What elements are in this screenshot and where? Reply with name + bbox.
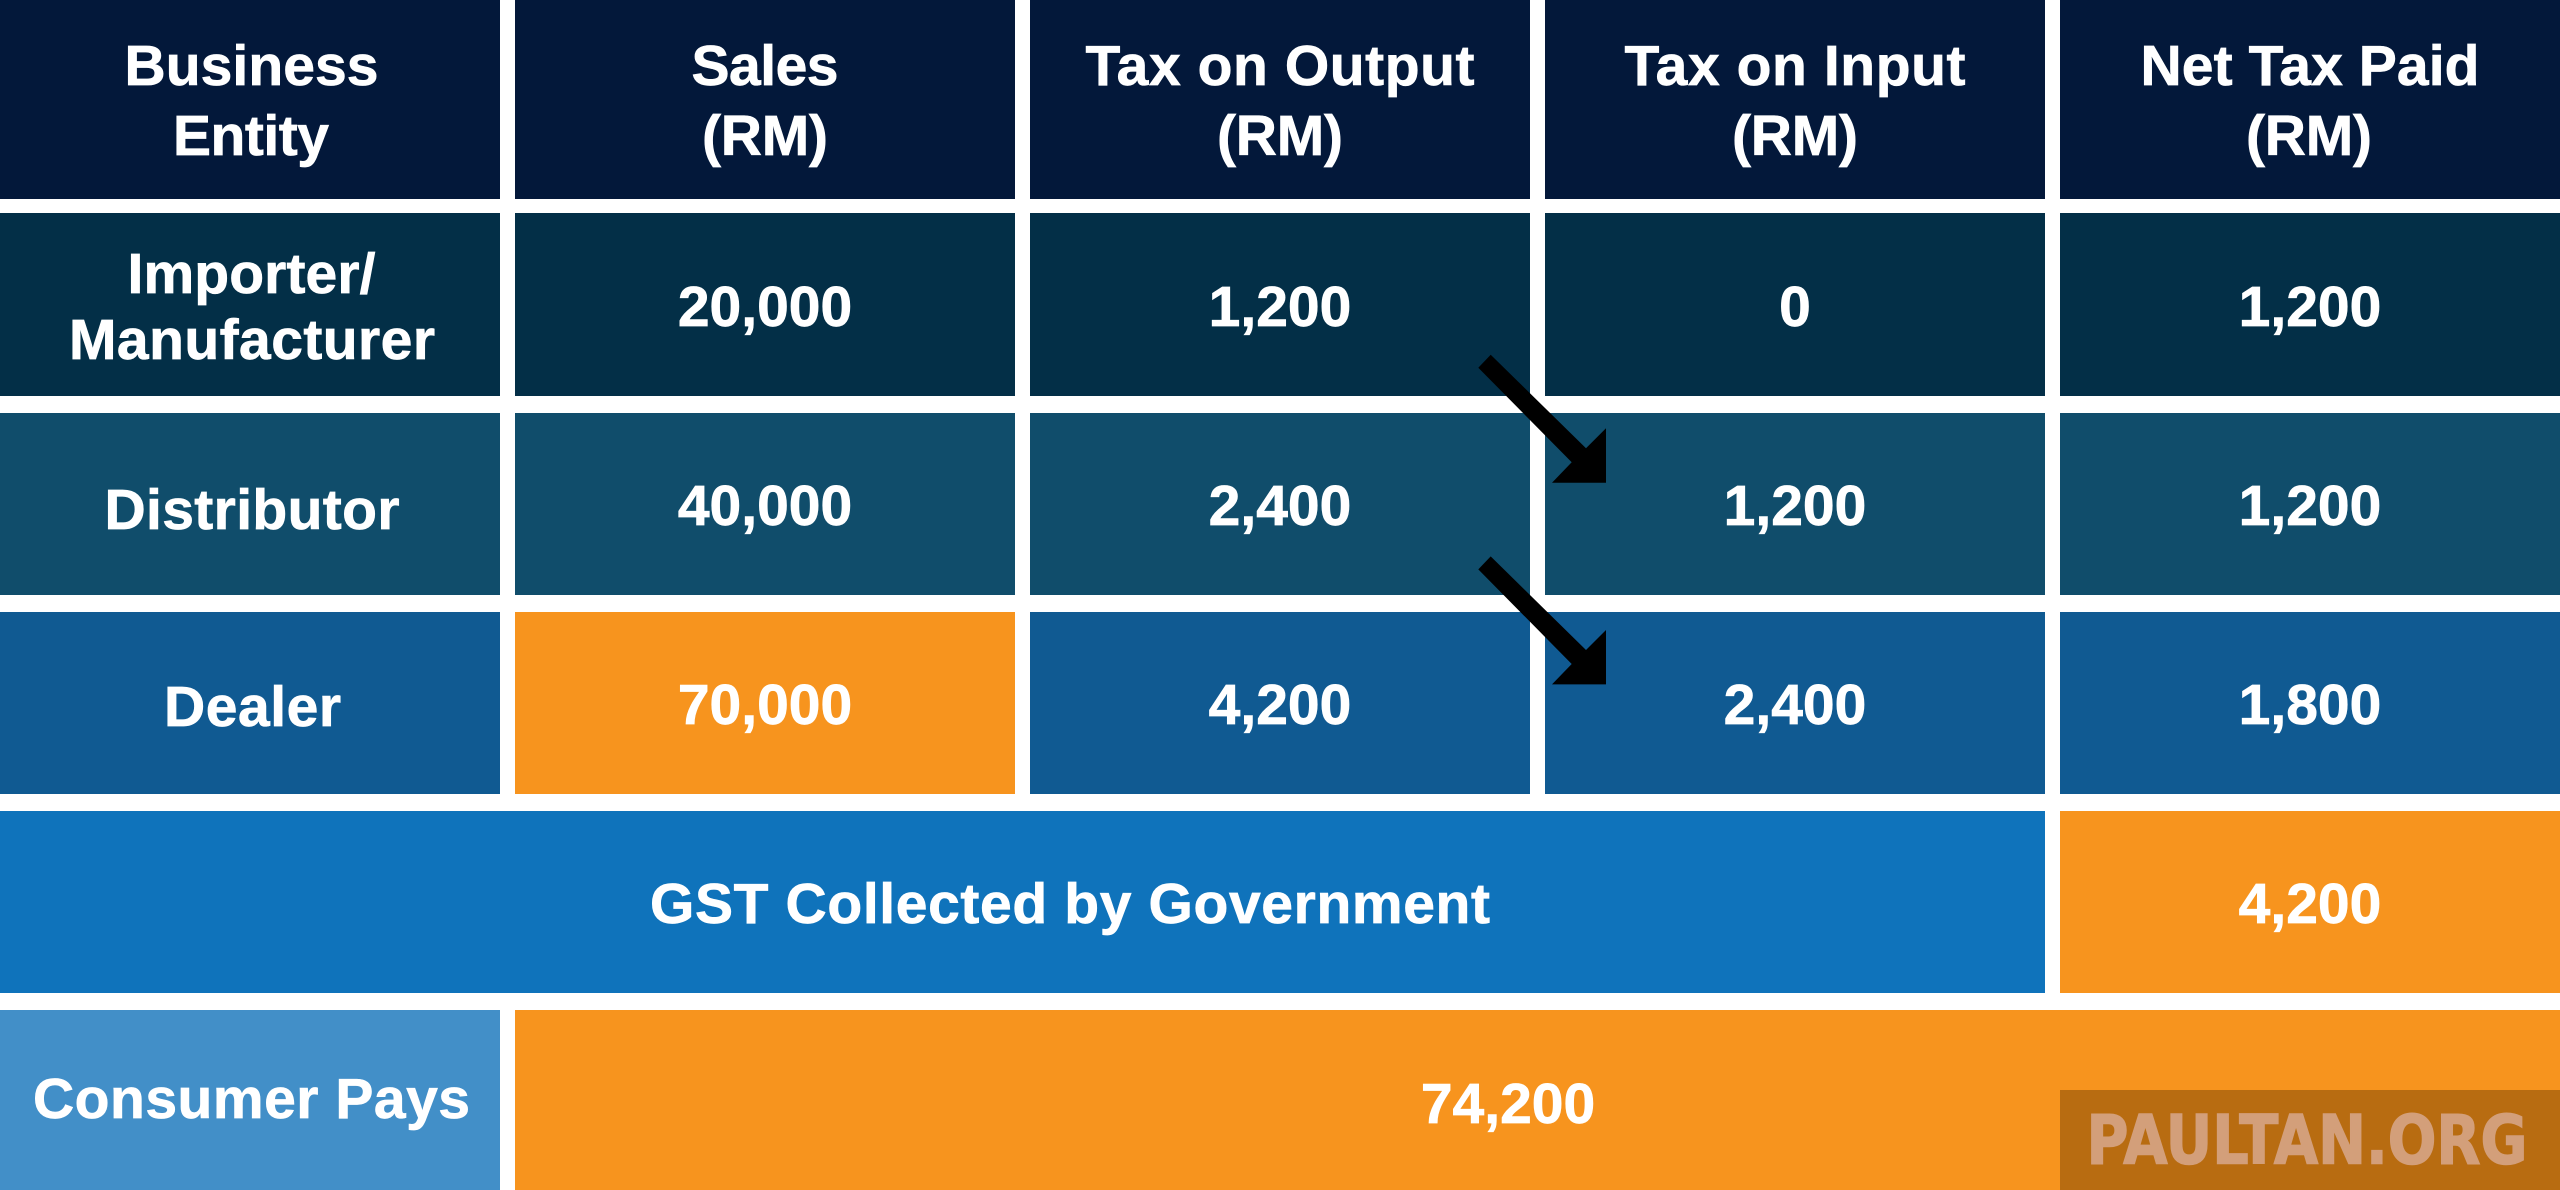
- header cell: Tax on Output: Tax on Output: [1086, 34, 1475, 98]
- arrow: output tax to dealer input tax: [1478, 556, 1606, 684]
- cell: dealer sales highlighted: 70,000: [678, 673, 852, 737]
- header cell: Sales: (RM): [702, 104, 828, 168]
- header cell: Business Entity: [0, 0, 500, 199]
- cell: consumer total: 74,200: [1421, 1072, 1595, 1136]
- cell: importer sales: 20,000: [678, 275, 852, 339]
- row label: Importer/Manufacturer: Manufacturer: [69, 308, 435, 372]
- cell: distributor net tax: 1,200: [2239, 474, 2381, 538]
- cell: dealer tax on input: 2,400: [1724, 673, 1866, 737]
- cell: importer tax on input: 0: [1779, 275, 1811, 339]
- cell: importer tax on input: [1545, 213, 2045, 396]
- header cell: Net Tax Paid: (RM): [2246, 104, 2372, 168]
- row label: Distributor: Distributor: [104, 478, 400, 542]
- row label: Consumer Pays: [0, 1010, 500, 1190]
- header cell: Sales: Sales: [692, 34, 838, 98]
- cell: distributor tax on output: 2,400: [1209, 474, 1351, 538]
- cell: distributor sales: [515, 413, 1015, 595]
- row label: Distributor: [0, 413, 500, 595]
- banner: GST Collected by Government: GST Collected by Government: [650, 872, 1490, 936]
- header cell: Business Entity: Business: [124, 34, 378, 98]
- banner: GST Collected by Government: [0, 811, 2045, 993]
- cell: importer net tax: 1,200: [2239, 275, 2381, 339]
- row label: Importer/Manufacturer: [0, 213, 500, 396]
- cell: dealer tax on output: [1030, 612, 1530, 794]
- row label: Dealer: [0, 612, 500, 794]
- cell: dealer sales highlighted: [515, 612, 1015, 794]
- cell: distributor tax on input: [1545, 413, 2045, 595]
- cell: consumer total: [515, 1010, 2560, 1190]
- header cell: Tax on Input: (RM): [1732, 104, 1858, 168]
- cell: distributor net tax: [2060, 413, 2560, 595]
- header cell: Net Tax Paid: Net Tax Paid: [2140, 34, 2480, 98]
- header cell: Tax on Input: [1545, 0, 2045, 199]
- cell: distributor sales: 40,000: [678, 474, 852, 538]
- cell: importer tax on output: 1,200: [1209, 275, 1351, 339]
- row label: Dealer: Dealer: [164, 675, 341, 739]
- cell: dealer tax on output: 4,200: [1209, 673, 1351, 737]
- cell: GST total: [2060, 811, 2560, 993]
- row label: Importer/Manufacturer: Importer/: [128, 242, 376, 306]
- header cell: Tax on Input: Tax on Input: [1624, 34, 1966, 98]
- cell: distributor tax on output: [1030, 413, 1530, 595]
- row label: Consumer Pays: Consumer Pays: [33, 1067, 470, 1131]
- cell: dealer net tax: 1,800: [2239, 673, 2381, 737]
- header cell: Business Entity: Entity: [173, 104, 329, 168]
- cell: GST total: 4,200: [2239, 872, 2381, 936]
- cell: importer tax on output: [1030, 213, 1530, 396]
- arrow: output tax to distributor input tax: [1478, 355, 1606, 483]
- cell: dealer net tax: [2060, 612, 2560, 794]
- header cell: Tax on Output: (RM): [1217, 104, 1343, 168]
- header cell: Sales: [515, 0, 1015, 199]
- cell: importer sales: [515, 213, 1015, 396]
- header cell: Tax on Output: [1030, 0, 1530, 199]
- cell: dealer tax on input: [1545, 612, 2045, 794]
- cell: distributor tax on input: 1,200: [1724, 474, 1866, 538]
- cell: importer net tax: [2060, 213, 2560, 396]
- header cell: Net Tax Paid: [2060, 0, 2560, 199]
